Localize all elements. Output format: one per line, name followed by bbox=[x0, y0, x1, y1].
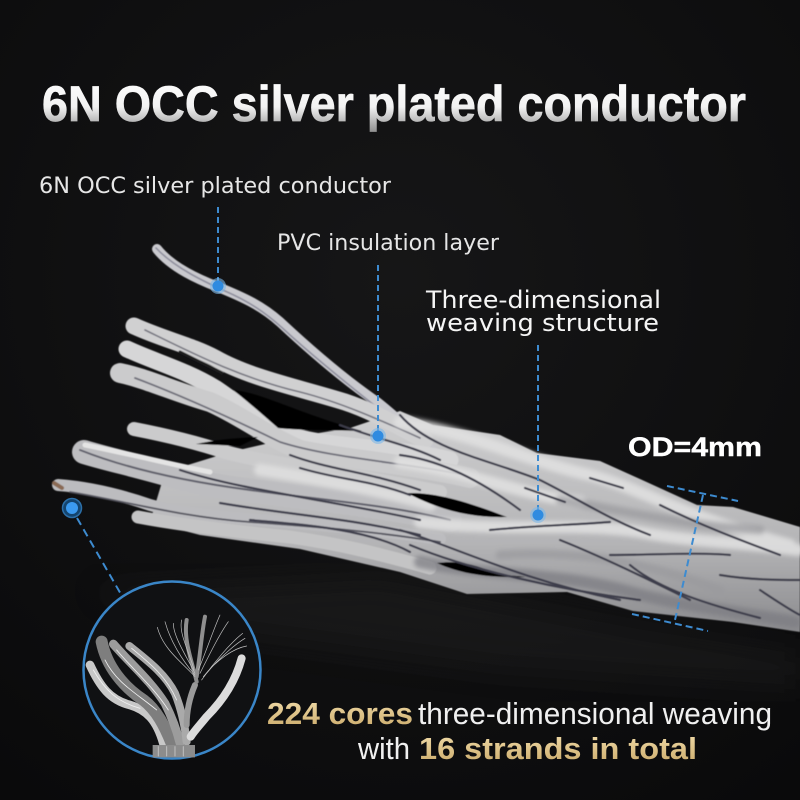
marker: weaving bbox=[530, 507, 546, 523]
callout: weaving bbox=[425, 286, 661, 523]
OD dimension bracket bbox=[632, 486, 738, 631]
dark streaks on cable bbox=[180, 415, 800, 618]
strand: sixth bbox=[84, 452, 450, 520]
caption line 2: with bbox=[357, 731, 410, 766]
cable photo illustration bbox=[54, 248, 800, 632]
strand: second bbox=[134, 326, 425, 440]
strand: eighth bbox=[138, 517, 430, 568]
end marker bbox=[62, 498, 82, 518]
dark gaps between strands bbox=[233, 390, 362, 431]
caption line 1: three-dimensional weaving bbox=[418, 696, 772, 731]
strand: third bbox=[127, 349, 450, 460]
caption line 1: 224 cores bbox=[267, 696, 413, 731]
strand: fourth bbox=[120, 373, 470, 478]
label: weaving: Three-dimensional bbox=[425, 286, 661, 314]
cable reflection bbox=[90, 575, 800, 690]
leader: conductor bbox=[217, 207, 219, 286]
strand: top tip bbox=[157, 249, 445, 462]
marker: PVC bbox=[370, 428, 386, 444]
highlights on twist bbox=[260, 422, 798, 622]
inset strands bbox=[90, 615, 247, 757]
leader: PVC bbox=[377, 265, 379, 436]
strand: seventh bbox=[58, 485, 440, 539]
label: weaving: weaving structure bbox=[426, 309, 659, 337]
caption line 2: 16 strands in total bbox=[419, 731, 697, 766]
label: conductor: 6N OCC silver plated conductor bbox=[39, 174, 392, 199]
cable body bbox=[150, 411, 800, 632]
inset circle: strand detail bbox=[84, 582, 260, 758]
callout: conductor bbox=[39, 174, 392, 294]
label: PVC: PVC insulation layer bbox=[277, 231, 500, 256]
title: 6N OCC silver plated conductor bbox=[42, 76, 746, 132]
marker: conductor bbox=[210, 278, 226, 294]
leader to inset bbox=[77, 518, 122, 596]
OD label: OD=4mm bbox=[628, 432, 762, 462]
strand: fifth bbox=[134, 429, 440, 492]
bottom caption bbox=[267, 696, 772, 766]
leader: weaving bbox=[537, 345, 539, 515]
strand tip copper bbox=[54, 483, 62, 488]
callout: PVC bbox=[277, 231, 500, 444]
